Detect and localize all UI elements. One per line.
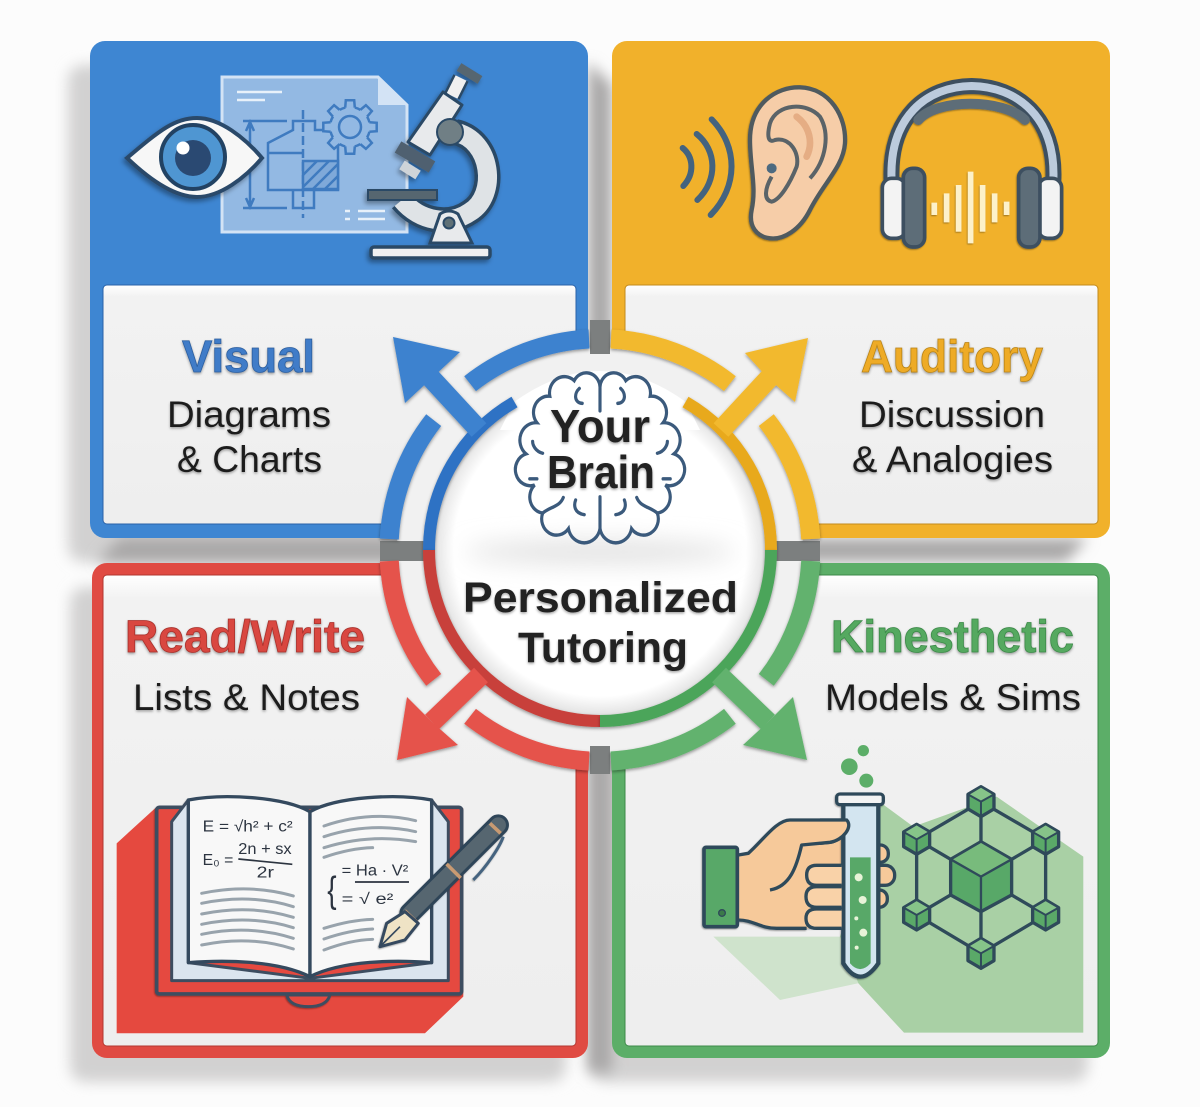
icon: open book with pen (117, 797, 503, 1033)
heading: kinesthetic: Kinesthetic (831, 611, 1074, 662)
panel body: kinesthetic (625, 575, 1098, 1046)
panel frame: visual (90, 41, 588, 538)
green shadow block (713, 937, 858, 1000)
heading: auditory: Auditory (861, 331, 1043, 382)
book formulas: E = √h² + c² (203, 819, 293, 836)
panel frame: auditory (612, 41, 1110, 538)
ring: blue quadrant with arrow (389, 337, 589, 550)
hand palm and cuff (704, 820, 849, 928)
text: lists and notes: Lists & Notes (133, 677, 360, 718)
icon: sound waves (683, 119, 732, 215)
panel: auditory (612, 41, 1110, 538)
panel: read/write (92, 563, 588, 1058)
drops (841, 745, 873, 788)
connector bars (380, 320, 820, 774)
heading: read/write: Read/Write (125, 611, 365, 662)
top hub highlight (500, 371, 700, 430)
icon: hand, test tube and molecule (704, 745, 1083, 1033)
book formulas: 2n + sx (238, 841, 292, 858)
hub title: your brain: Your (550, 400, 650, 452)
panel body: auditory (625, 285, 1098, 524)
text: diagrams and charts (167, 394, 331, 480)
icon: fountain pen (380, 823, 503, 947)
book shadow block (117, 808, 463, 1033)
panel: visual (90, 41, 588, 538)
hub inner disc (434, 384, 766, 716)
hub disc (397, 347, 803, 753)
hub title: personalized tutoring: Personalized (463, 574, 738, 622)
text: models and sims: Models & Sims (825, 677, 1081, 718)
hub title: your brain: Brain (547, 446, 655, 498)
book pages (188, 797, 432, 977)
panel body: read/write (103, 575, 576, 1046)
hub title: your brain (547, 400, 655, 498)
text: discussion and analogies: & Analogies (852, 439, 1053, 480)
book formulas (203, 819, 409, 911)
panel body: visual (103, 285, 576, 524)
thumb and front fingers (806, 820, 849, 928)
test tube (837, 794, 883, 977)
icon: brain outline (515, 373, 685, 543)
hub center crease (465, 540, 735, 564)
icon: ear (750, 87, 845, 238)
ring: green quadrant with arrow (600, 550, 811, 761)
book text lines (202, 816, 416, 950)
icon: blueprint document (222, 77, 407, 232)
text: diagrams and charts: Diagrams (167, 394, 331, 435)
ring: yellow quadrant with arrow (611, 338, 811, 550)
panel frame: read/write (92, 563, 588, 1058)
book formulas: = Ha · V² (342, 863, 408, 880)
text: discussion and analogies: Discussion (859, 394, 1045, 435)
green shadow block main (840, 797, 1083, 1033)
text: discussion and analogies (852, 394, 1053, 480)
panel cast shadows (68, 65, 1088, 1082)
shadows in gaps between panels (96, 62, 1088, 1072)
icon: headphones (882, 86, 1062, 247)
hub: central cycle (380, 320, 820, 774)
panel frame: kinesthetic (612, 563, 1110, 1058)
hand behind-tube fingers (870, 845, 895, 907)
icon: microscope (368, 67, 490, 258)
text: diagrams and charts: & Charts (177, 439, 322, 480)
book formulas: { (327, 870, 337, 911)
hub title: personalized tutoring: Tutoring (518, 624, 688, 672)
book formulas: = √ e² (342, 891, 393, 908)
panel: kinesthetic (612, 563, 1110, 1058)
heading: visual: Visual (182, 331, 315, 382)
molecule (904, 787, 1059, 968)
icon: eye (127, 118, 262, 197)
hub title: personalized tutoring (463, 574, 738, 672)
ring: red quadrant with arrow (389, 550, 600, 761)
book formulas: E₀ = (203, 852, 233, 869)
book formulas: 2r (257, 864, 274, 881)
book cover (157, 800, 462, 1007)
